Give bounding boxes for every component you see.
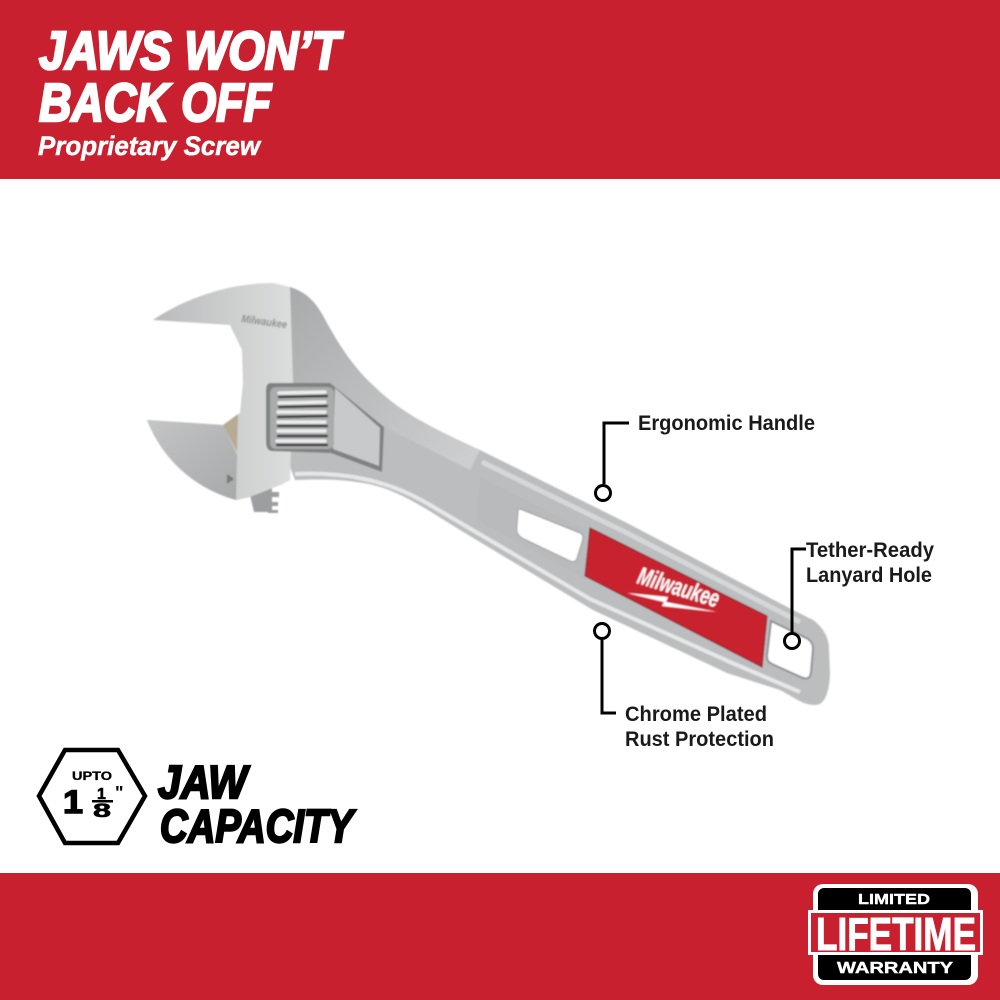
handle lower edge highlight (295, 474, 800, 692)
worm teeth (250, 488, 279, 513)
adjustment screw (270, 387, 334, 449)
subtitle: Proprietary Screw (38, 131, 262, 161)
Milwaukee head mark: Milwaukee (241, 313, 288, 331)
window inner face (333, 388, 380, 466)
sliding jaw (147, 283, 293, 500)
jaw capacity label: JAW (158, 756, 250, 808)
red handle grip (585, 528, 767, 667)
callout: tether-ready lanyard hole (784, 539, 934, 648)
screw window (266, 383, 384, 472)
icon: jaw capacity hexagon: " (115, 783, 124, 803)
icon: jaw capacity hexagon: 1 (63, 784, 83, 820)
icon: jaw capacity hexagon: 1 (97, 786, 106, 803)
callout: chrome plated rust protection: Rust Protection (625, 728, 774, 751)
warranty badge: LIMITED (858, 891, 930, 908)
callout: tether-ready lanyard hole: Lanyard Hole (806, 564, 932, 587)
lower jaw face (147, 420, 237, 500)
callout: ergonomic handle (596, 412, 815, 500)
top banner (0, 0, 1000, 179)
callout: chrome plated rust protection (594, 624, 774, 751)
jaw throat (223, 414, 238, 452)
jaw capacity label (158, 756, 357, 852)
icon: jaw capacity hexagon (39, 750, 145, 843)
title: BACK OFF (39, 73, 273, 133)
title (39, 21, 343, 133)
icon: jaw capacity hexagon: 8 (93, 801, 111, 822)
jaw capacity label: CAPACITY (160, 800, 357, 852)
warranty badge: WARRANTY (837, 960, 953, 977)
wrench illustration (147, 283, 830, 705)
icon: jaw capacity hexagon: UPTO (72, 771, 112, 783)
callout: ergonomic handle: Ergonomic Handle (638, 412, 815, 435)
bottom banner (0, 873, 1000, 1000)
scale arrow (227, 474, 234, 484)
handle recess (476, 477, 585, 578)
grip logo: Milwaukee (634, 562, 723, 613)
slot (517, 509, 583, 562)
shaded neck (290, 287, 480, 470)
grip logo (627, 562, 723, 613)
lanyard hole (767, 621, 813, 678)
title: JAWS WON’T (39, 21, 343, 81)
wrench body and handle (280, 287, 830, 705)
callout: tether-ready lanyard hole: Tether-Ready (806, 539, 934, 562)
callout: chrome plated rust protection: Chrome Plated (625, 703, 767, 726)
handle upper rail highlight (482, 462, 800, 622)
warranty badge (808, 884, 983, 985)
